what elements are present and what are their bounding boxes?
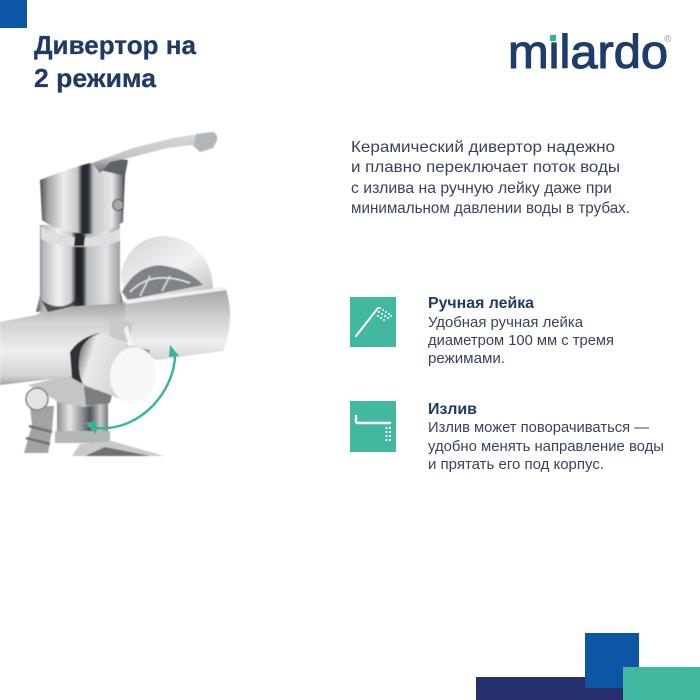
lower joint — [28, 375, 112, 407]
diverter knob cap — [106, 344, 160, 406]
neck ring — [41, 226, 120, 247]
neck shadow — [41, 296, 82, 312]
corner blocks: bottom right — [476, 633, 700, 700]
feature: spout text: Излив — [428, 401, 477, 418]
feature: hand shower text — [428, 295, 614, 367]
feature: hand shower text: Ручная лейка — [428, 295, 534, 312]
icon: spout — [350, 401, 396, 452]
feature: spout text: удобно менять направление воды — [428, 438, 664, 455]
diverter cylinder — [79, 333, 150, 403]
intro paragraph: с излива на ручную лейку даже при — [351, 180, 612, 197]
illustration: chrome faucet with diverter — [0, 132, 230, 456]
screw — [112, 200, 124, 210]
intro paragraph: минимальном давлении воды в трубах. — [351, 200, 630, 217]
left body — [0, 302, 128, 385]
arrow: diverter rotation — [85, 345, 179, 434]
lever handle — [92, 132, 217, 173]
mixer cap — [40, 163, 125, 234]
lever mechanism — [100, 158, 128, 176]
spout collar — [55, 400, 164, 456]
feature: spout text: Излив может поворачиваться — — [428, 419, 649, 436]
lever paddle — [194, 132, 217, 152]
wall disc — [121, 236, 213, 300]
hose nut — [26, 388, 48, 410]
hose fitting — [24, 406, 54, 453]
title: Дивертор на — [34, 30, 197, 60]
title: 2 режима — [34, 63, 157, 93]
feature: hand shower text: режимами. — [428, 350, 505, 367]
logo: milardo: milardo — [508, 25, 668, 78]
icon: hand shower — [350, 297, 396, 347]
intro paragraph: и плавно переключает поток воды — [351, 159, 620, 176]
corner block: top left — [0, 0, 27, 28]
feature: spout text: и прятать его под корпус. — [428, 456, 604, 473]
mixer neck — [36, 225, 124, 312]
intro paragraph — [351, 139, 630, 217]
feature: hand shower text: диаметром 100 мм с тремя — [428, 332, 614, 349]
lever tab — [108, 317, 133, 343]
right body — [125, 287, 230, 360]
joint shadow — [84, 386, 112, 406]
intro paragraph: Керамический дивертор надежно — [351, 139, 615, 156]
title — [34, 30, 197, 93]
feature: spout text — [428, 401, 664, 473]
collar shadow — [70, 333, 100, 385]
logo: milardo: ® — [664, 34, 672, 45]
feature: hand shower text: Удобная ручная лейка — [428, 314, 584, 331]
